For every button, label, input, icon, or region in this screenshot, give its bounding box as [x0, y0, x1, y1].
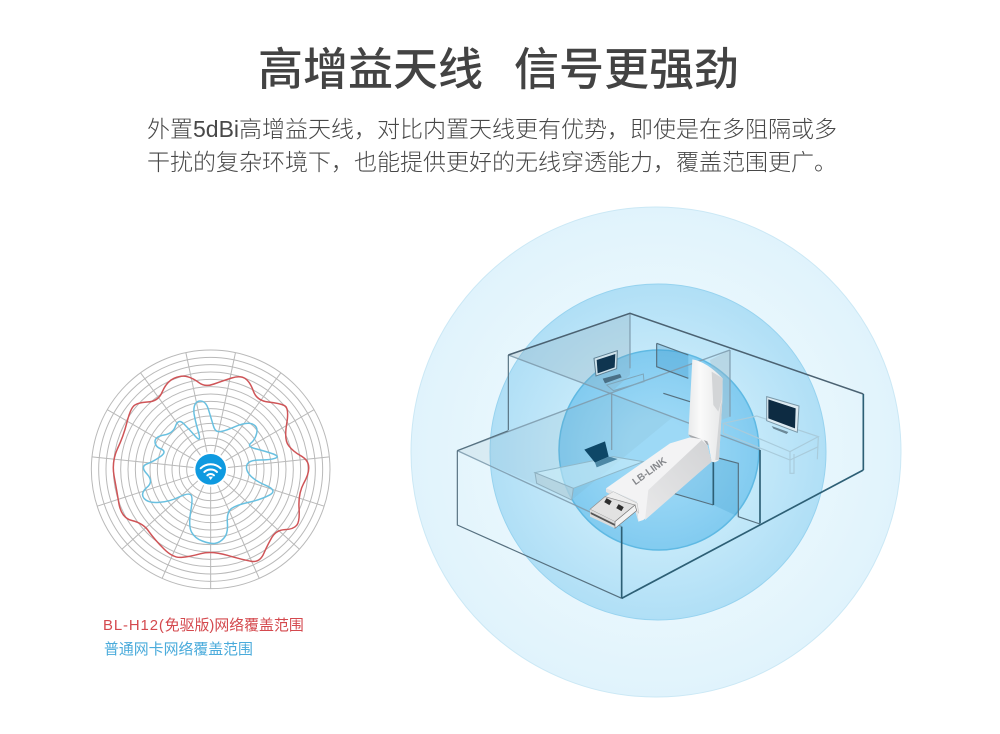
adapter body: [606, 437, 712, 522]
legend item: red: BL-H12(免驱版)网络覆盖范围: [103, 618, 304, 634]
red coverage curve: [113, 376, 309, 561]
usb wifi adapter: [590, 359, 723, 528]
title: 高增益天线: [258, 44, 483, 95]
radar chart: coverage comparison: [91, 350, 330, 589]
desk: right room: [723, 416, 818, 473]
wall outlines: [457, 313, 760, 527]
icon: wifi badge: [195, 454, 226, 485]
intro text: [147, 116, 837, 175]
legend: [103, 617, 304, 658]
brand label: LB-LINK: [631, 455, 670, 488]
legend item: blue: 普通网卡网络覆盖范围: [104, 642, 253, 658]
wall tints: [457, 313, 738, 517]
floor plan: rooms with glass walls: [457, 313, 863, 598]
intro text: 干扰的复杂环境下，也能提供更好的无线穿透能力，覆盖范围更广。: [147, 149, 837, 175]
desk: left room: [535, 457, 643, 500]
signal coverage circles: [411, 207, 901, 697]
title: [258, 44, 739, 95]
antenna: [688, 359, 723, 462]
icon: monitor left: [594, 351, 644, 391]
blue coverage curve: [143, 401, 277, 543]
icon: laptop: [584, 441, 618, 467]
title: 信号更强劲: [514, 44, 739, 95]
usb plug: [605, 492, 639, 513]
intro text: 外置5dBi高增益天线，对比内置天线更有优势，即使是在多阻隔或多: [147, 116, 837, 142]
icon: monitor right: [767, 397, 799, 434]
